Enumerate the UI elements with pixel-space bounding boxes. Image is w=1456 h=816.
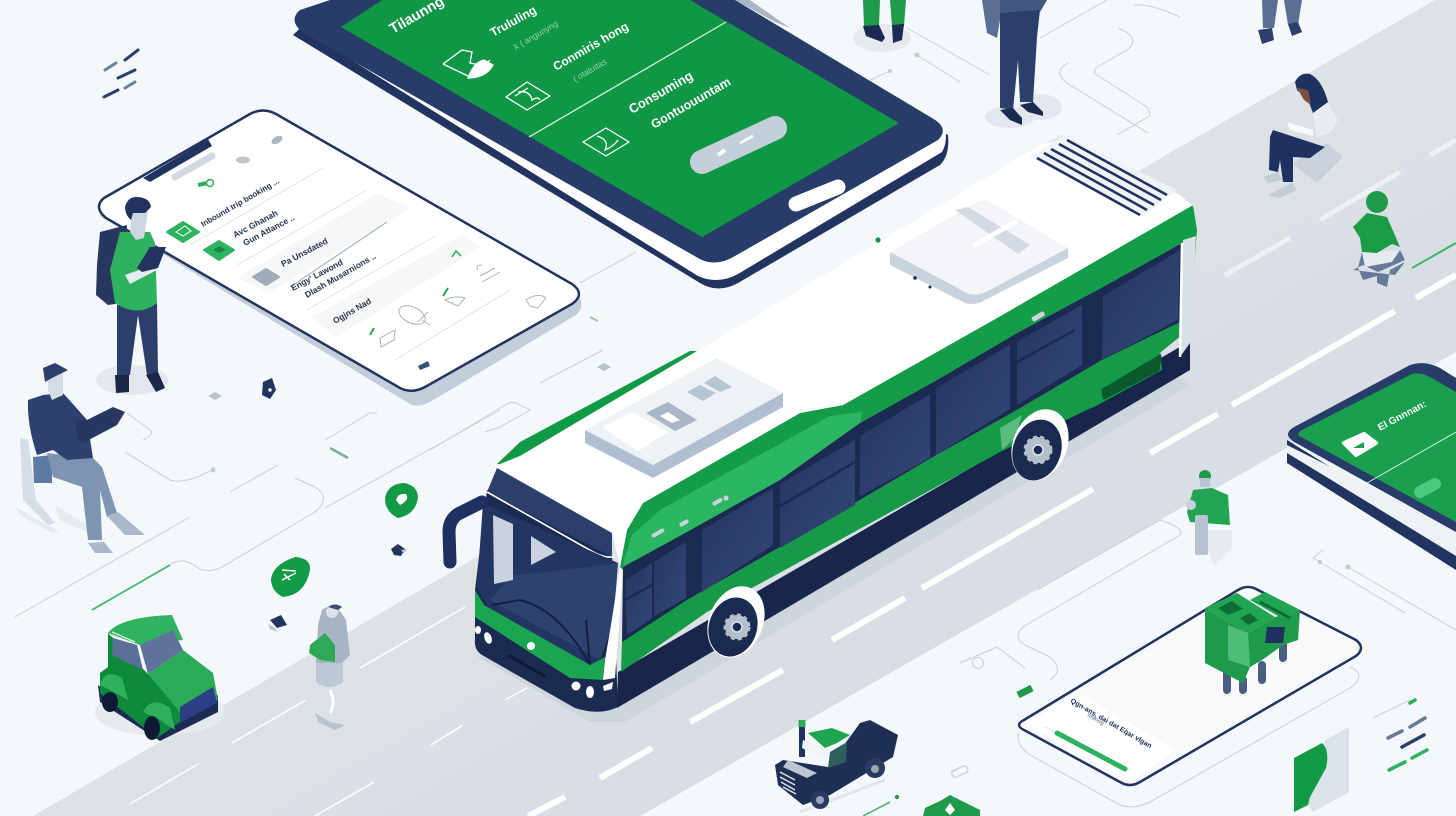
screen headings: ( otatuitas	[571, 56, 608, 84]
bottom right dashes	[1388, 700, 1427, 770]
map pin: lower	[271, 557, 310, 597]
person top: navy	[982, 0, 1062, 128]
side windows	[625, 250, 1180, 635]
green tag	[1018, 688, 1032, 695]
truck grille	[780, 772, 796, 794]
visor	[487, 468, 612, 557]
front wheel	[697, 578, 775, 666]
face	[1297, 88, 1311, 105]
roof	[497, 137, 1195, 567]
phone face	[99, 110, 579, 391]
roof	[108, 615, 183, 645]
seated woman	[1263, 74, 1343, 198]
fenders	[100, 674, 175, 730]
green list icons	[167, 222, 234, 260]
icon: top left dashes	[104, 50, 138, 97]
car under body	[98, 685, 218, 741]
screen pill button	[702, 128, 775, 162]
grille	[180, 687, 217, 723]
phone face	[1019, 587, 1361, 785]
phone base	[293, 0, 948, 288]
shoes	[1263, 172, 1297, 198]
mirror	[449, 502, 482, 562]
right phone bezel	[1288, 363, 1456, 532]
right phone base	[1287, 440, 1456, 570]
screen headings	[387, 0, 733, 132]
wipers	[492, 600, 590, 665]
hair	[1295, 74, 1328, 113]
notch	[143, 139, 212, 182]
truck hood	[783, 760, 817, 778]
pill	[1420, 484, 1435, 492]
connector end dots	[210, 52, 1350, 570]
right phone title: El Gnnnan:	[1376, 399, 1429, 434]
list text	[200, 177, 378, 326]
rear wheel	[1000, 401, 1079, 489]
phone bezel shade	[735, 0, 790, 28]
chair	[1293, 143, 1343, 183]
roof unit front	[585, 358, 783, 478]
big green phone	[293, 0, 948, 288]
screen headings: k ( angunyng	[512, 18, 560, 52]
list text: Pa Unsdated	[279, 236, 329, 269]
speaker pill	[175, 156, 212, 177]
mini bus	[1205, 592, 1300, 690]
arm	[125, 266, 157, 284]
visor white trim	[487, 492, 615, 557]
chair	[20, 438, 55, 525]
map pin: upper	[385, 483, 418, 518]
screen divider	[529, 22, 726, 137]
hood	[148, 650, 218, 712]
person top right	[1258, 0, 1302, 44]
lower garment	[33, 455, 52, 483]
list text: Gun Atlance ..	[241, 212, 296, 248]
truck wheels	[811, 791, 829, 809]
shoes	[115, 372, 165, 393]
screen headings: Trululing	[488, 3, 539, 40]
list text: Ogjns Nad	[331, 296, 373, 326]
pickup truck	[775, 720, 898, 812]
roof rim	[700, 135, 1075, 352]
bottom small marks	[863, 765, 969, 816]
list cards	[242, 196, 476, 334]
green house icon bottom	[923, 795, 980, 816]
navy tag and small marks	[208, 317, 611, 458]
separators	[190, 168, 510, 360]
front grille line	[508, 655, 546, 677]
arm and laptop	[75, 407, 125, 443]
green person right	[1353, 191, 1405, 287]
hair	[125, 197, 151, 220]
list text: Inbound trip booking ...	[200, 177, 281, 229]
home button	[796, 187, 838, 204]
green accent line	[92, 565, 170, 610]
white app icon	[1344, 434, 1376, 455]
tablet	[137, 247, 166, 272]
windshield reflections	[493, 515, 513, 584]
truck body	[775, 720, 898, 805]
person with backpack	[96, 197, 168, 395]
ticket card	[1026, 692, 1175, 782]
upper green band	[620, 205, 1197, 575]
A pillar	[603, 567, 623, 680]
list text: Engy' Lawond	[289, 257, 345, 293]
screen icons	[443, 50, 629, 156]
truck roof	[808, 728, 850, 748]
rear grille panel	[1092, 348, 1162, 408]
truck side window	[828, 742, 847, 768]
torso	[28, 393, 93, 460]
green car	[95, 615, 225, 741]
progress bar	[1045, 727, 1125, 768]
screen headings: Conmiris hong	[550, 19, 631, 74]
status icons	[198, 134, 284, 186]
roof lights	[651, 311, 1046, 538]
windows	[112, 638, 143, 670]
ticket text: Qgn-ans, dai dat Eqar vlgan	[1069, 698, 1153, 750]
seated person with laptop	[15, 363, 145, 553]
headlights	[475, 626, 613, 698]
shadow	[96, 365, 168, 395]
small grey app icons	[253, 251, 546, 370]
list text: Dlash Musarnions ..	[303, 251, 378, 300]
standing woman	[309, 604, 350, 730]
trousers	[1269, 130, 1325, 182]
lower side skirt	[617, 343, 1190, 708]
white app phone	[99, 110, 581, 406]
screen headings: Consuming	[626, 68, 695, 117]
windshield	[477, 503, 618, 665]
head	[48, 372, 63, 400]
roof green edge	[497, 351, 697, 464]
front body	[475, 490, 618, 712]
roof vent	[1030, 135, 1177, 217]
phone bezel	[294, 0, 943, 263]
bottom phone with mini bus	[1019, 587, 1361, 785]
shoes	[88, 512, 145, 553]
window band	[622, 243, 1182, 642]
leaf card icon	[1294, 727, 1349, 812]
right road line accent	[1412, 243, 1456, 268]
screen headings: Gontuouuntam	[648, 75, 733, 132]
front green band	[475, 590, 605, 680]
car side	[100, 633, 180, 738]
rear corner strip	[1180, 236, 1196, 357]
truck exhaust	[799, 722, 805, 757]
book	[1287, 122, 1313, 136]
lane markings	[130, 140, 1456, 816]
shirt	[1313, 102, 1338, 137]
lower green band	[621, 315, 1182, 672]
person top: green trousers	[853, 0, 911, 52]
backpack	[96, 225, 127, 305]
bus shadow	[475, 375, 1190, 722]
wheels	[102, 692, 118, 712]
phone white edge	[297, 0, 946, 280]
divider	[1367, 432, 1456, 483]
right phone screen	[1298, 373, 1456, 522]
legs	[117, 303, 158, 375]
legs	[47, 453, 117, 540]
bus	[449, 135, 1197, 712]
ticket text: nfanog	[1086, 713, 1105, 727]
shirt	[110, 232, 157, 310]
right green phone	[1287, 363, 1456, 570]
roof unit rear	[890, 200, 1068, 304]
phone thickness	[100, 120, 581, 406]
neck and face	[130, 210, 148, 240]
phone screen	[341, 0, 899, 237]
list text: Avc Ghanah	[231, 208, 279, 240]
navy markers	[268, 544, 407, 632]
small link icon	[972, 658, 984, 668]
truck windshield	[802, 740, 830, 760]
person on road	[1186, 470, 1232, 566]
